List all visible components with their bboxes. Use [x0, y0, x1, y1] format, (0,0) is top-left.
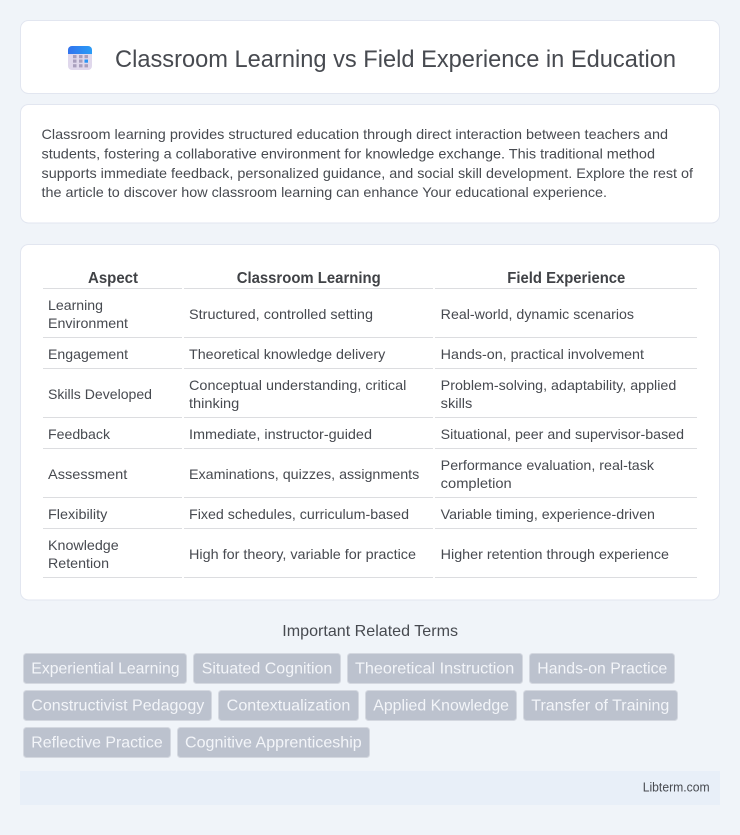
- row: learning environment: Environment: [48, 315, 128, 331]
- row: skills developed: Conceptual understanding, critical: [189, 377, 406, 393]
- tag: applied knowledge: [366, 690, 516, 720]
- title: Classroom Learning vs Field Experience in Education: [115, 46, 676, 73]
- tag list: related terms: [24, 654, 678, 758]
- row: knowledge retention: Higher retention through experience: [441, 546, 669, 562]
- row: flexibility: Fixed schedules, curriculum-based: [189, 506, 409, 522]
- row: assessment: Examinations, quizzes, assignments: [189, 466, 419, 482]
- row: learning environment: [43, 297, 697, 338]
- row: engagement: Engagement: [48, 346, 128, 362]
- tag: transfer of training: [524, 690, 678, 720]
- row: engagement: Hands-on, practical involvement: [441, 346, 644, 362]
- table header row: Classroom Learning: [237, 270, 381, 287]
- row: learning environment: Structured, controlled setting: [189, 306, 373, 322]
- tag: experiential learning: Experiential Learning: [31, 660, 179, 678]
- footer: [20, 771, 720, 805]
- tag: experiential learning: [24, 654, 186, 684]
- tag: hands-on practice: Hands-on Practice: [537, 660, 667, 678]
- row: assessment: [43, 457, 697, 498]
- row: feedback: Situational, peer and supervisor-based: [441, 426, 684, 442]
- panel: intro paragraph: Classroom learning provides structured education through direct interaction between teachers and: [42, 126, 668, 142]
- tag: reflective practice: Reflective Practice: [31, 735, 163, 752]
- row: feedback: Immediate, instructor-guided: [189, 426, 372, 442]
- row: skills developed: Problem-solving, adaptability, applied: [441, 377, 676, 393]
- table header row: Field Experience: [507, 270, 625, 287]
- tag: constructivist pedagogy: [24, 690, 212, 720]
- footer: Libterm.com: [643, 781, 710, 795]
- row: assessment: Assessment: [48, 466, 127, 482]
- tag: transfer of training: Transfer of Training: [531, 698, 669, 715]
- tag: situated cognition: Situated Cognition: [202, 660, 332, 678]
- tag: cognitive apprenticeship: Cognitive Apprenticeship: [185, 735, 362, 752]
- row: skills developed: Skills Developed: [48, 386, 152, 402]
- row: skills developed: [43, 377, 697, 418]
- icon: calendar: [68, 46, 92, 70]
- tag: hands-on practice: [530, 654, 674, 684]
- panel: intro paragraph: students, fostering a collaborative environment for knowledge exchange. This traditional method: [42, 145, 655, 161]
- row: flexibility: Variable timing, experience-driven: [441, 506, 655, 522]
- tag: theoretical instruction: [348, 654, 522, 684]
- row: knowledge retention: [43, 537, 697, 578]
- row: knowledge retention: Retention: [48, 555, 109, 571]
- row: engagement: Theoretical knowledge delivery: [189, 346, 385, 362]
- tag: constructivist pedagogy: Constructivist Pedagogy: [31, 698, 204, 715]
- panel: intro paragraph: [20, 104, 720, 223]
- row: flexibility: Flexibility: [48, 506, 107, 522]
- row: skills developed: thinking: [189, 395, 239, 411]
- row: learning environment: Learning: [48, 297, 103, 313]
- tag: theoretical instruction: Theoretical Instruction: [355, 660, 514, 678]
- table header row: Aspect: [88, 270, 139, 287]
- row: skills developed: skills: [441, 395, 472, 411]
- row: learning environment: Real-world, dynamic scenarios: [441, 306, 634, 322]
- tag: applied knowledge: Applied Knowledge: [373, 698, 509, 715]
- row: knowledge retention: Knowledge: [48, 537, 119, 553]
- tag: contextualization: Contextualization: [227, 698, 350, 715]
- heading: important related terms: Important Related Terms: [282, 623, 458, 640]
- tag: cognitive apprenticeship: [178, 728, 370, 758]
- tag: reflective practice: [24, 728, 170, 758]
- row: engagement: [43, 346, 697, 369]
- row: knowledge retention: High for theory, variable for practice: [189, 546, 416, 562]
- panel: intro paragraph: the article to discover how classroom learning can enhance Your educational experience.: [42, 184, 607, 200]
- row: assessment: completion: [441, 475, 512, 491]
- tag: situated cognition: [194, 654, 340, 684]
- panel: comparison table: [20, 244, 720, 600]
- row: feedback: [43, 426, 697, 449]
- panel: title card: [20, 20, 720, 94]
- table header row: [43, 270, 697, 289]
- row: flexibility: [43, 506, 697, 529]
- tag: contextualization: [218, 690, 358, 720]
- panel: intro paragraph: supports immediate feedback, personalized guidance, and social skill development. Explore the rest of: [42, 165, 693, 181]
- row: assessment: Performance evaluation, real-task: [441, 457, 655, 473]
- row: feedback: Feedback: [48, 426, 111, 442]
